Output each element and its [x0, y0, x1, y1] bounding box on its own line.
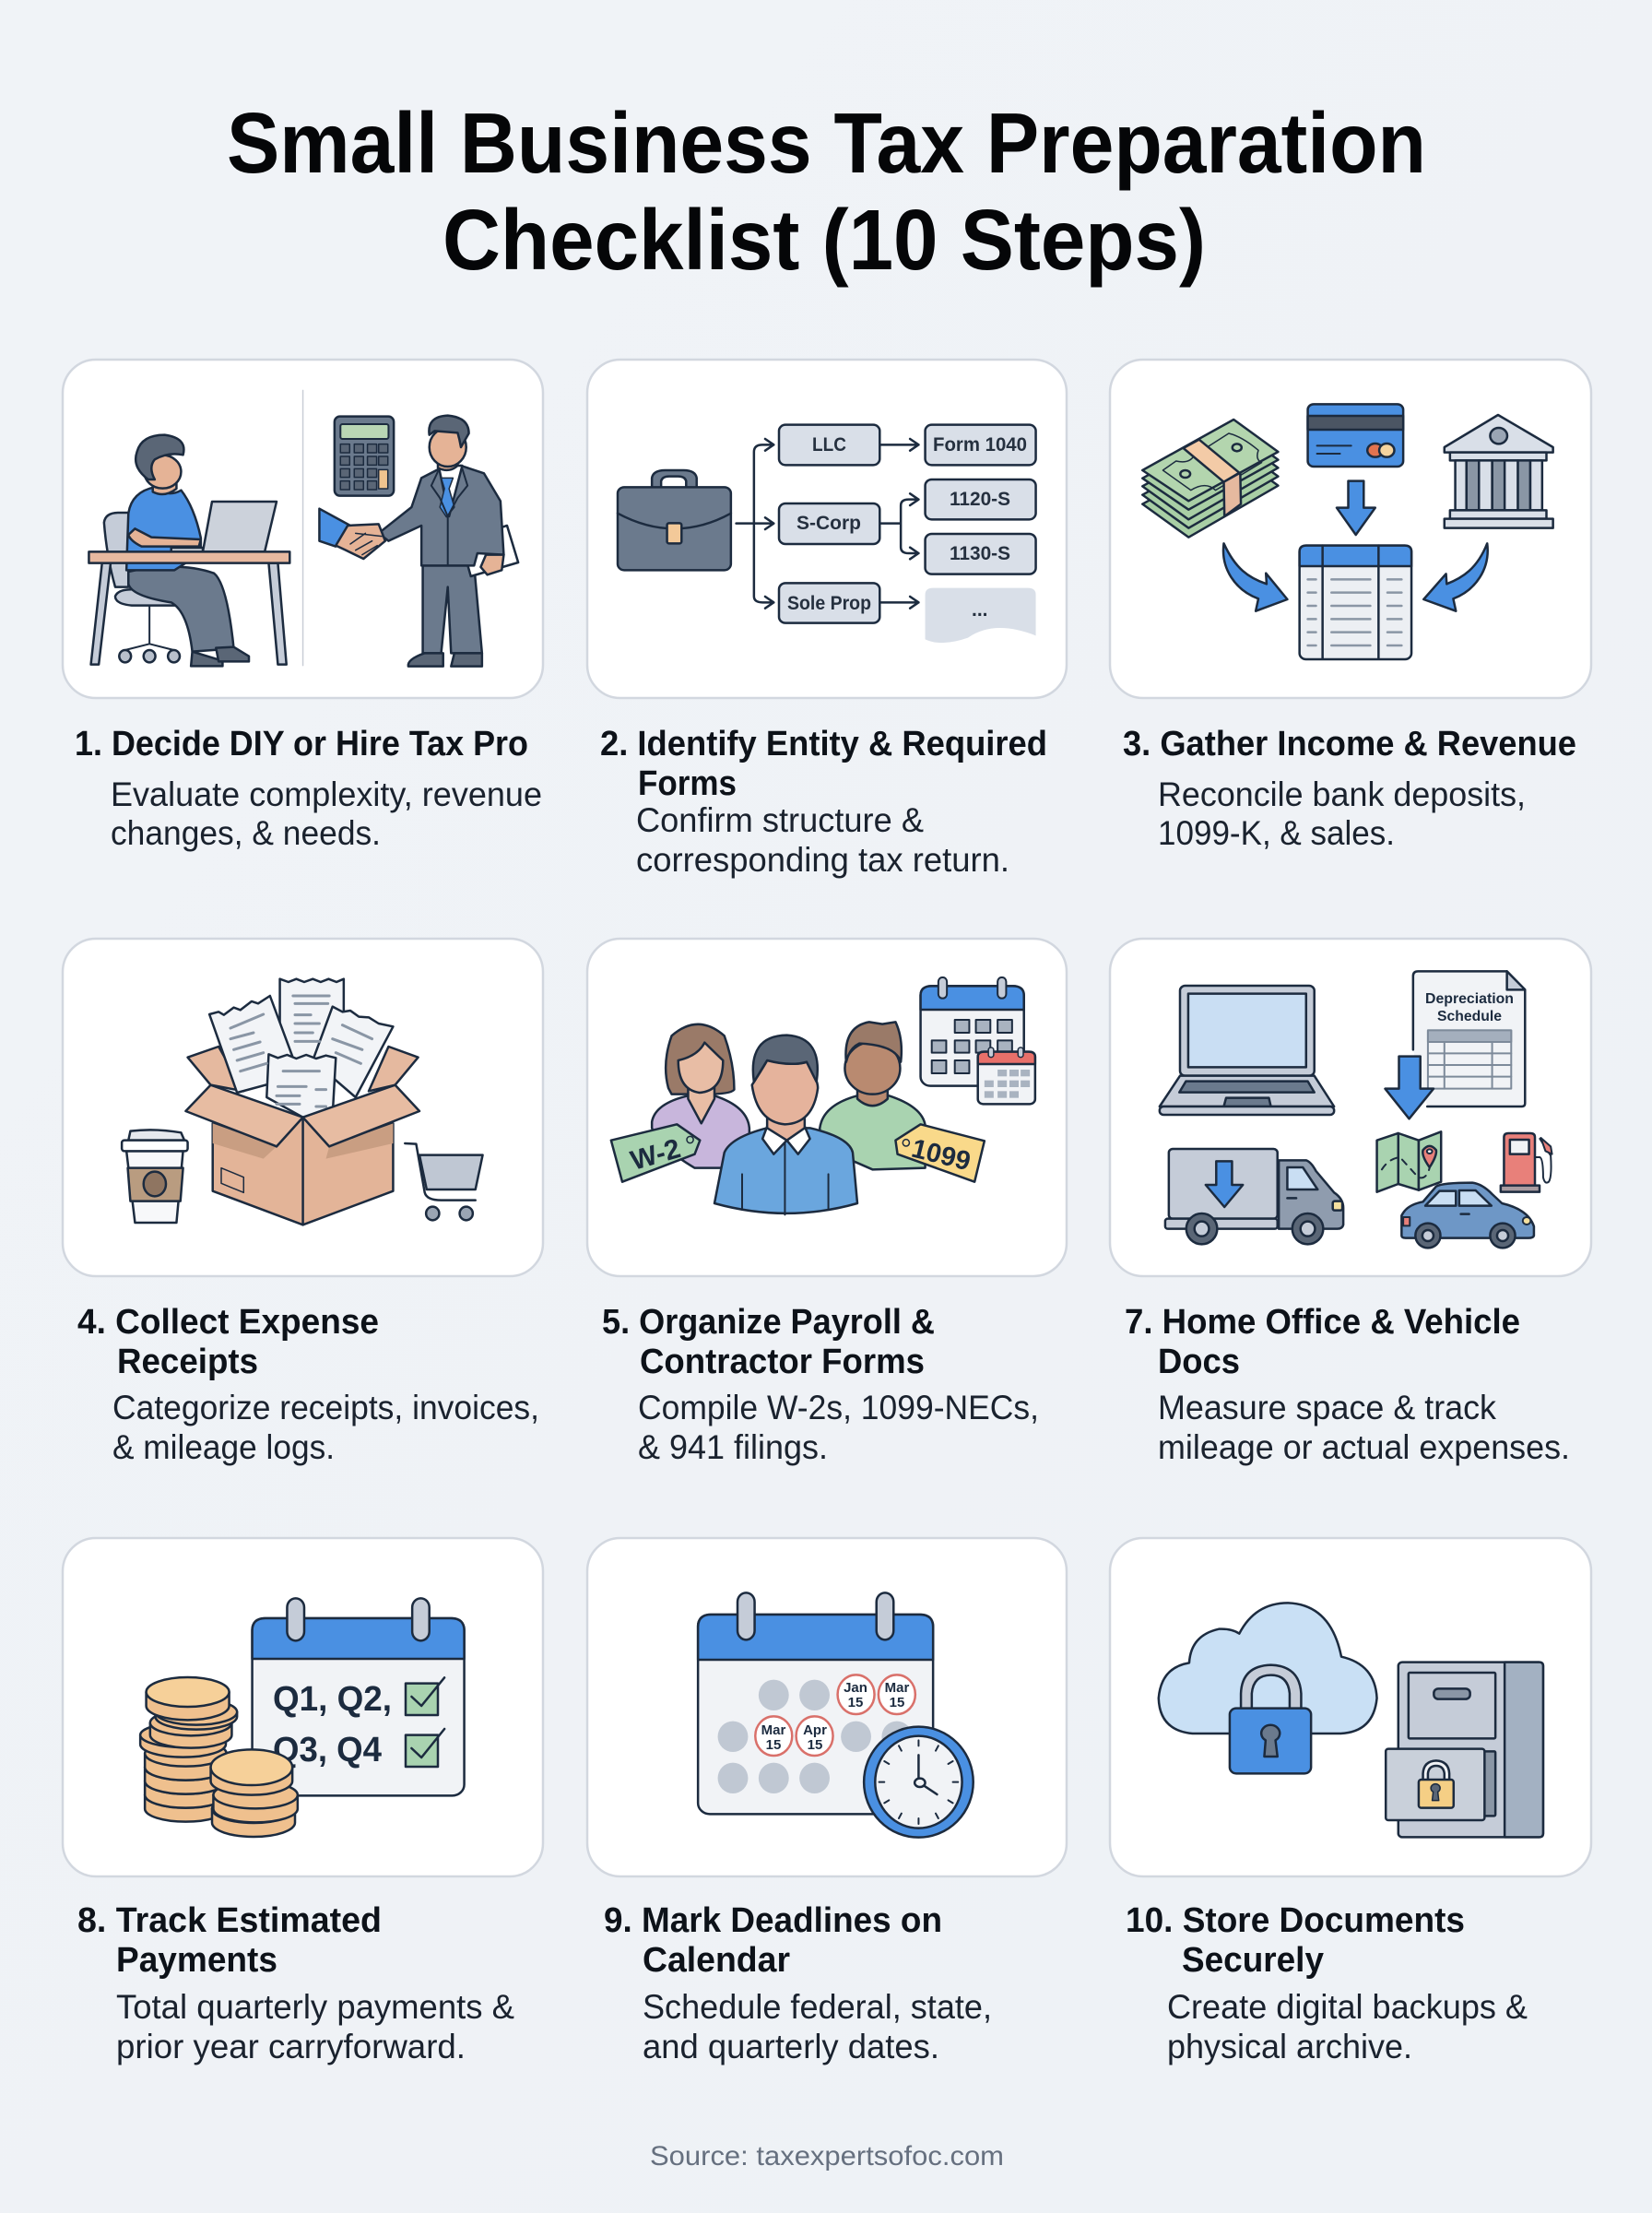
card: step 10 — [1110, 1538, 1591, 1876]
heading: step 1: 1. Decide DIY or Hire Tax Pro — [75, 725, 528, 763]
heading: step 2: 2. Identify Entity & Required — [600, 725, 1047, 763]
arrow: cash to ledger — [1223, 543, 1287, 611]
card: step 2 — [587, 360, 1067, 698]
description: step 2 — [636, 801, 1009, 879]
calendar labels: deadline dates: 15 — [890, 1695, 904, 1710]
description: step 5 — [638, 1389, 1039, 1466]
arrow: card to ledger — [1337, 481, 1375, 535]
document label: depreciation schedule — [1425, 991, 1514, 1024]
icon: contractor man — [820, 1022, 926, 1169]
icon: bank — [1445, 415, 1553, 528]
calendar labels: quarters: Q1, Q2, — [273, 1680, 392, 1719]
card: step 3 — [1110, 360, 1591, 698]
description: step 8 — [116, 1988, 514, 2065]
illustration: home office and vehicle docs — [1160, 971, 1552, 1248]
calendar labels: deadline dates: Jan — [844, 1680, 867, 1696]
icon: calendars — [921, 977, 1035, 1104]
heading: step 5 — [602, 1303, 935, 1381]
icon: fuel pump — [1501, 1133, 1552, 1192]
heading: step 9: 9. Mark Deadlines on — [604, 1901, 942, 1940]
description: step 3: Reconcile bank deposits, — [1158, 775, 1526, 813]
icon: map with pin — [1377, 1131, 1441, 1192]
title: Small Business Tax Preparation — [227, 95, 1426, 191]
heading: step 2 — [600, 725, 1047, 803]
icon: cash stack — [1142, 420, 1278, 538]
icon: quarterly calendar — [253, 1598, 465, 1795]
calendar labels: quarters: Q3, Q4 — [273, 1731, 382, 1769]
card: step 5 — [587, 939, 1067, 1276]
document label: depreciation schedule: Schedule — [1437, 1009, 1502, 1024]
card: step 4 — [63, 939, 543, 1276]
icon: person at laptop — [88, 435, 289, 666]
heading: step 9: Calendar — [643, 1941, 790, 1980]
heading: step 3: 3. Gather Income & Revenue — [1123, 725, 1576, 763]
description: step 3 — [1158, 775, 1526, 852]
document label: depreciation schedule: Depreciation — [1425, 991, 1514, 1007]
icon: cloud with lock — [1159, 1603, 1377, 1773]
icon: tax professional — [379, 416, 518, 667]
heading: step 8: Payments — [116, 1941, 277, 1980]
calendar labels: deadline dates: 15 — [808, 1737, 822, 1753]
description: step 1: Evaluate complexity, revenue — [111, 775, 542, 813]
illustration: workers with tax tags — [611, 977, 1035, 1214]
icon: woman — [652, 1024, 749, 1168]
icon: coffee cup — [122, 1130, 188, 1223]
card: step 9 — [587, 1538, 1067, 1876]
description: step 2: corresponding tax return. — [636, 841, 1009, 879]
title — [227, 95, 1426, 288]
description: step 4: & mileage logs. — [112, 1428, 335, 1466]
icon: calculator — [335, 417, 394, 496]
panel: step 9 mark deadlines — [587, 1538, 1067, 2065]
description: step 10 — [1167, 1988, 1528, 2065]
calendar labels: deadline dates: Mar — [761, 1722, 785, 1738]
calendar labels: deadline dates — [761, 1680, 909, 1753]
icon: open box with receipts — [185, 979, 419, 1225]
icon: delivery truck — [1165, 1149, 1343, 1244]
labels: entity and form names: Form 1040 — [933, 434, 1027, 456]
heading: step 4: Receipts — [117, 1343, 258, 1381]
icon: center employee — [714, 1035, 857, 1214]
arrow: to vehicle docs — [1385, 1057, 1434, 1118]
heading: step 10: Securely — [1182, 1941, 1324, 1980]
labels: entity and form names: 1120-S — [950, 489, 1010, 510]
illustration: income sources into ledger — [1142, 404, 1553, 659]
heading: step 8 — [77, 1901, 382, 1980]
tag shape: W-2 — [611, 1124, 700, 1182]
labels: entity and form names: S-Corp — [796, 513, 861, 534]
boxes: entity and form nodes — [779, 425, 1036, 643]
panel: step 1 decide DIY or hire tax pro — [63, 360, 543, 852]
description: step 9 — [643, 1988, 992, 2065]
card: step 7 — [1110, 939, 1591, 1276]
description: step 5: Compile W-2s, 1099-NECs, — [638, 1389, 1039, 1426]
panel: step 3 gather income — [1110, 360, 1591, 852]
heading: step 5: Contractor Forms — [640, 1343, 925, 1381]
icon: credit card — [1308, 404, 1403, 467]
icon: ledger spreadsheet — [1300, 546, 1411, 659]
heading: step 10 — [1126, 1901, 1465, 1980]
source footer: Source: taxexpertsofoc.com — [650, 2141, 1004, 2172]
calendar labels: quarters — [273, 1680, 392, 1769]
heading: step 2: Forms — [638, 764, 737, 803]
tag label: W-2: W-2 — [627, 1133, 684, 1177]
description: step 1 — [111, 775, 542, 852]
description: step 5: & 941 filings. — [638, 1428, 828, 1466]
calendar labels: deadline dates: Apr — [803, 1722, 827, 1738]
labels: entity and form names: LLC — [812, 434, 846, 456]
arrow: bank to ledger — [1423, 543, 1488, 611]
calendar labels: deadline dates: Mar — [885, 1680, 909, 1696]
tag label: 1099: 1099 — [909, 1134, 974, 1177]
calendar labels: deadline dates: 15 — [848, 1695, 863, 1710]
labels: entity and form names: 1130-S — [950, 543, 1010, 564]
illustration: receipts box — [122, 979, 483, 1225]
heading: step 7: 7. Home Office & Vehicle — [1125, 1303, 1520, 1342]
heading: step 9 — [604, 1901, 942, 1980]
icon: deadline calendar — [698, 1592, 933, 1814]
icon: shopping cart — [405, 1143, 483, 1220]
labels: entity and form names: ... — [972, 599, 988, 621]
heading: step 4: 4. Collect Expense — [77, 1303, 379, 1342]
description: step 7: mileage or actual expenses. — [1158, 1428, 1570, 1466]
card: step 1 — [63, 360, 543, 698]
description: step 7 — [1158, 1389, 1570, 1466]
panel: step 2 identify entity — [587, 360, 1067, 879]
arrows: flow connectors — [737, 439, 918, 609]
description: step 4: Categorize receipts, invoices, — [112, 1389, 539, 1426]
description: step 8: Total quarterly payments & — [116, 1988, 514, 2026]
description: step 10: physical archive. — [1167, 2028, 1412, 2065]
heading: step 8: 8. Track Estimated — [77, 1901, 382, 1940]
panel: step 7 home office and vehicle — [1110, 939, 1591, 1466]
icon: clock — [864, 1727, 974, 1838]
labels: entity and form names — [787, 434, 1027, 621]
labels: entity and form names: Sole Prop — [787, 593, 871, 614]
illustration: DIY person and tax pro — [88, 390, 518, 667]
panel: step 10 store documents — [1110, 1538, 1591, 2065]
heading: step 4 — [77, 1303, 379, 1381]
title: Checklist (10 Steps) — [442, 192, 1206, 288]
description: step 4 — [112, 1389, 539, 1466]
illustration: quarterly calendar and coins — [140, 1598, 465, 1837]
description: step 9: Schedule federal, state, — [643, 1988, 992, 2026]
heading: step 10: 10. Store Documents — [1126, 1901, 1465, 1940]
tag shape: 1099 — [895, 1124, 985, 1182]
description: step 1: changes, & needs. — [111, 814, 381, 852]
heading: step 7: Docs — [1158, 1343, 1240, 1381]
description: step 9: and quarterly dates. — [643, 2028, 939, 2065]
diagram: entity to forms flow — [618, 425, 1036, 643]
icon: coin stacks — [140, 1677, 298, 1837]
card: step 8 — [63, 1538, 543, 1876]
icon: briefcase — [618, 470, 731, 570]
description: step 10: Create digital backups & — [1167, 1988, 1528, 2026]
description: step 8: prior year carryforward. — [116, 2028, 466, 2065]
panel: step 5 organize payroll — [587, 939, 1067, 1466]
icon: handshake — [319, 509, 385, 559]
icon: filing cabinet with lock — [1386, 1663, 1543, 1837]
panel: step 4 collect expense receipts — [63, 939, 543, 1466]
calendar labels: deadline dates: 15 — [766, 1737, 781, 1753]
description: step 7: Measure space & track — [1158, 1389, 1496, 1426]
icon: laptop — [1160, 986, 1334, 1115]
description: step 2: Confirm structure & — [636, 801, 924, 839]
illustration: cloud and filing cabinet security — [1159, 1603, 1543, 1837]
illustration: deadline calendar and clock — [698, 1592, 974, 1838]
heading: step 5: 5. Organize Payroll & — [602, 1303, 935, 1342]
heading: step 7 — [1125, 1303, 1520, 1381]
icon: car — [1401, 1183, 1534, 1248]
panel: step 8 track estimated payments — [63, 1538, 543, 2065]
description: step 3: 1099-K, & sales. — [1158, 814, 1395, 852]
icon: depreciation schedule document — [1413, 971, 1525, 1106]
